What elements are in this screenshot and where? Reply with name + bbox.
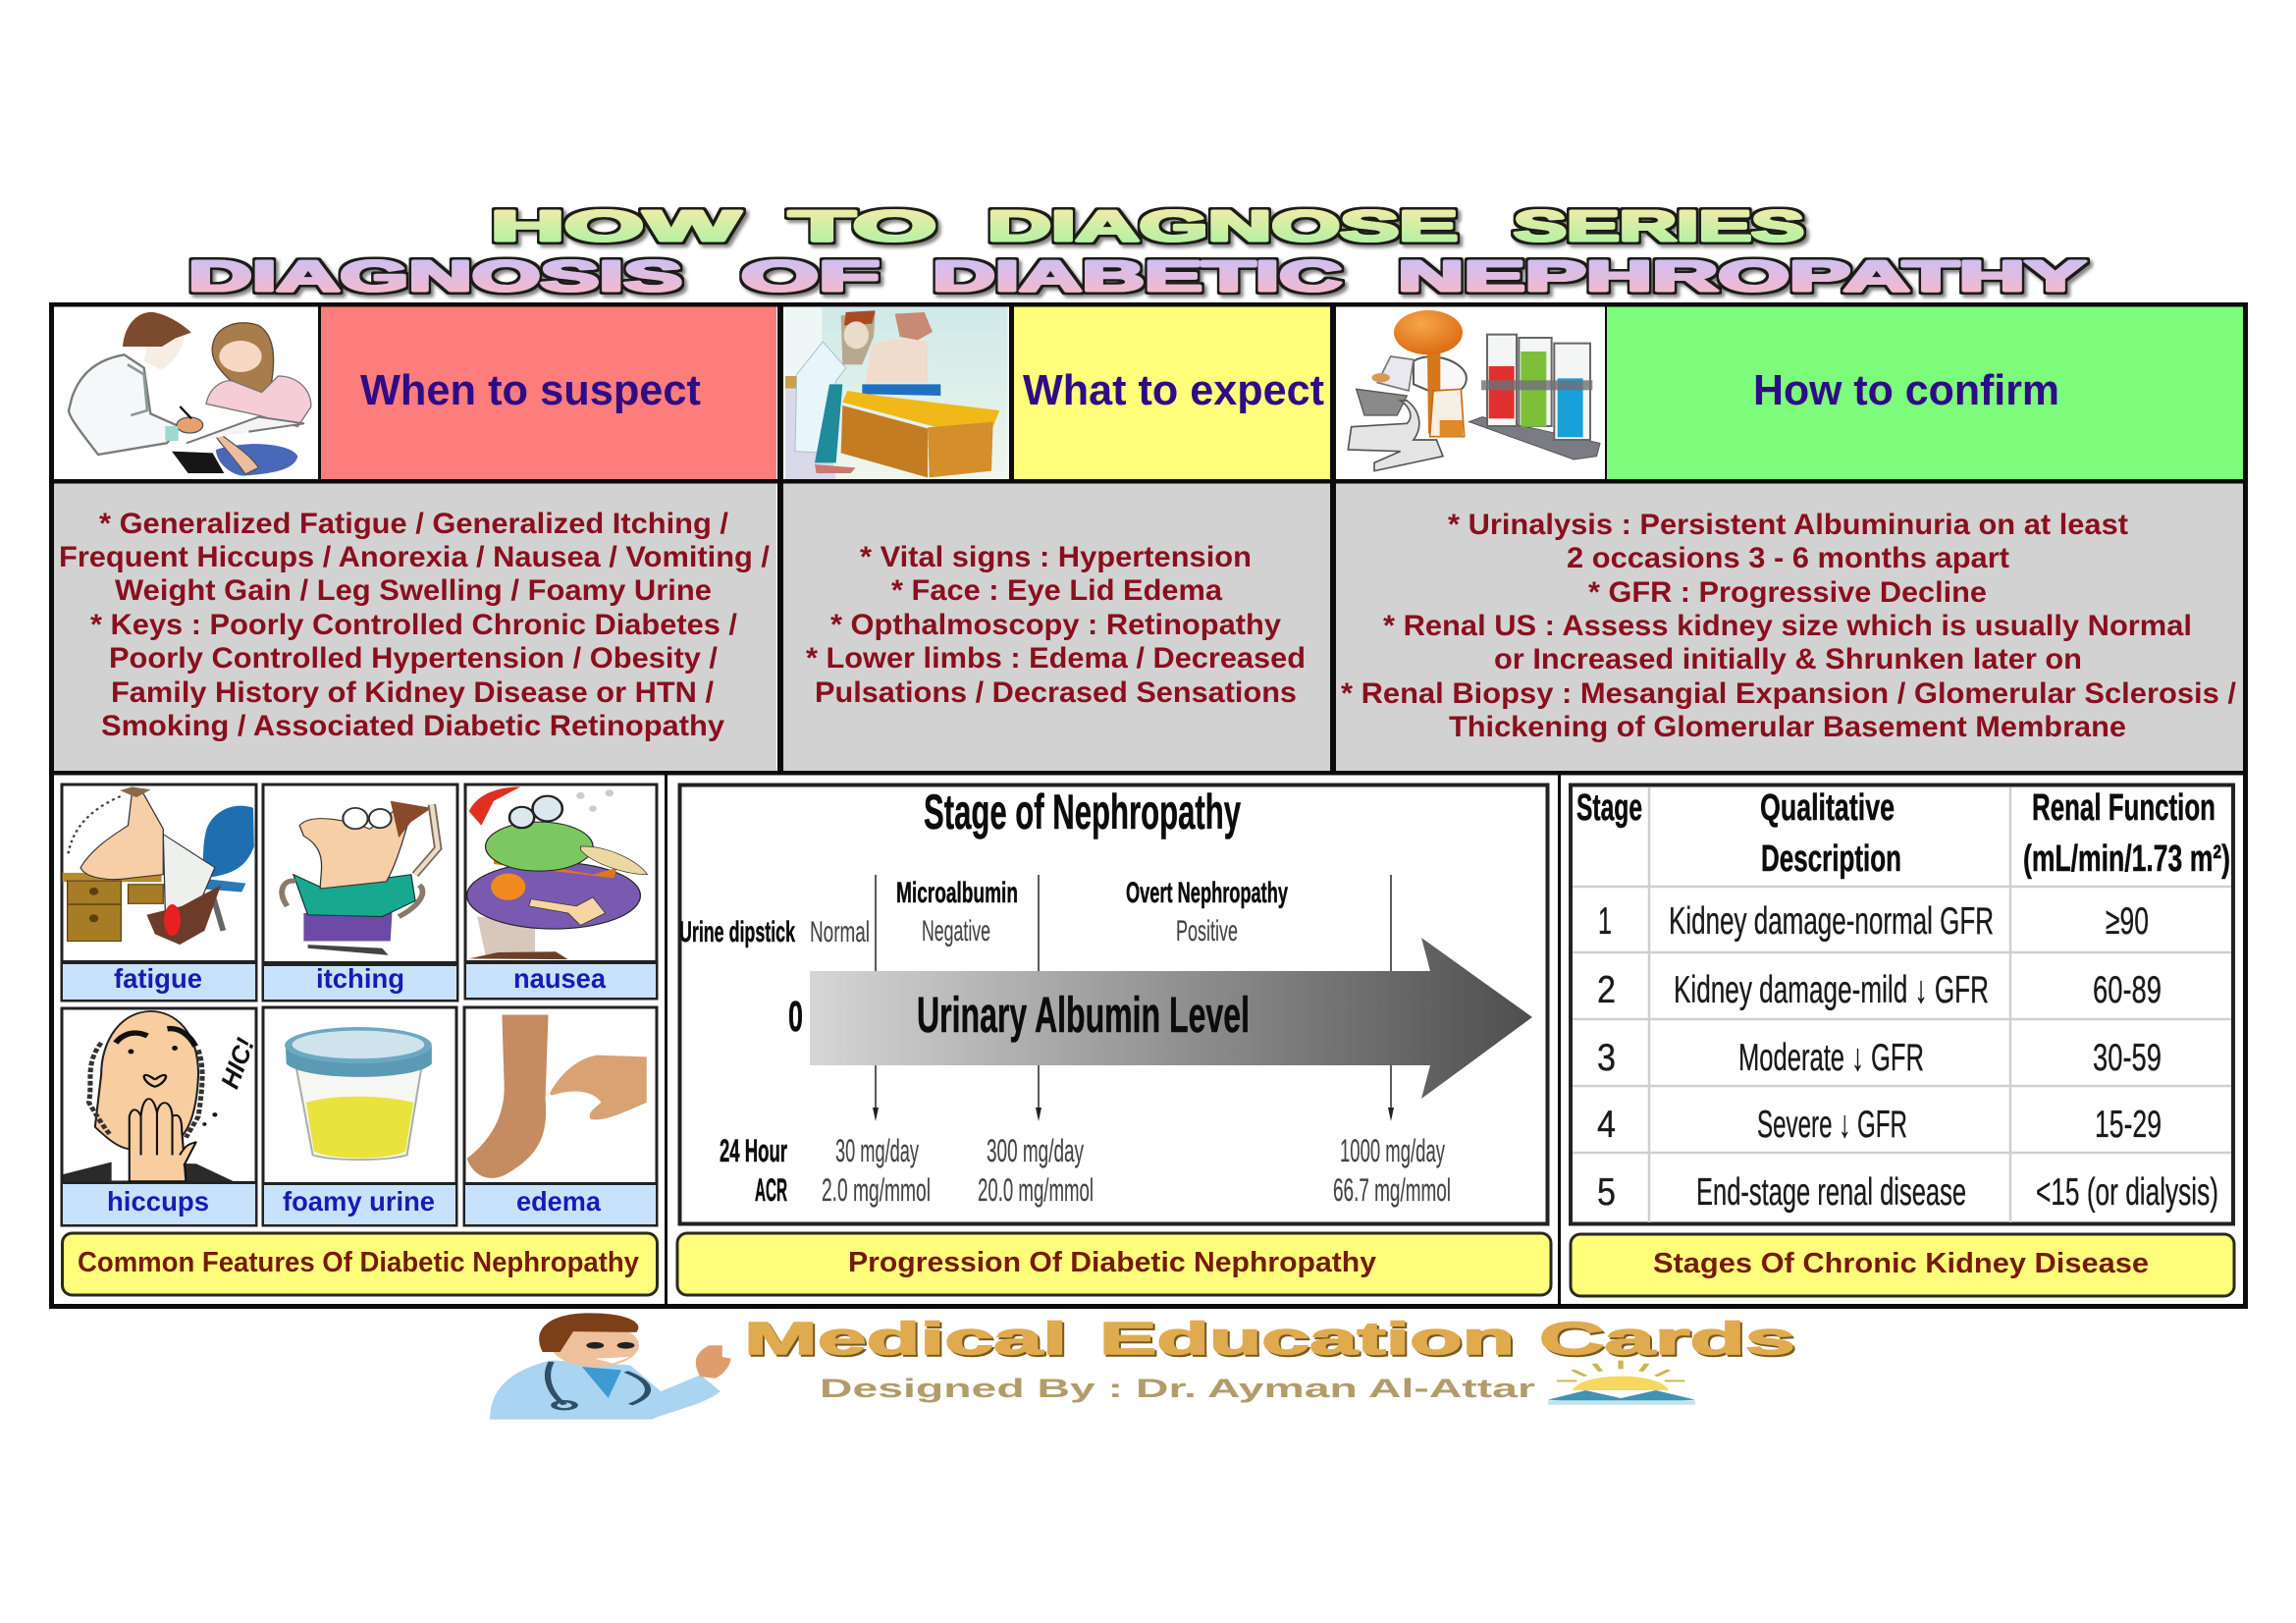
text block: confirm list: * Renal US : Assess kidney size which is usually Normal — [1383, 610, 2192, 642]
text block: suspect list: Family History of Kidney Disease or HTN / — [111, 676, 715, 709]
banner: stages: Stages Of Chronic Kidney Disease — [1653, 1248, 2149, 1279]
measurement labels: 30 mg/day — [835, 1133, 919, 1168]
heading: when to suspect: When to suspect — [360, 366, 701, 414]
text block: confirm list: * Urinalysis : Persistent Albuminuria on at least — [1448, 509, 2128, 541]
measurement labels: 66.7 mg/mmol — [1333, 1172, 1451, 1208]
banner: stages — [1571, 1234, 2234, 1296]
credit: designed by: Designed By : Dr. Ayman Al-Attar — [820, 1374, 1536, 1403]
table rows: End-stage renal disease — [1696, 1171, 1966, 1214]
text block: expect list: Pulsations / Decrased Sensations — [815, 676, 1297, 709]
table rows — [1597, 900, 2218, 1214]
text block: expect list: * Opthalmoscopy : Retinopathy — [830, 609, 1281, 641]
label: edema: edema — [516, 1186, 601, 1217]
panel: stages of chronic kidney disease — [1571, 785, 2234, 1296]
icon: man with hiccups — [63, 1011, 260, 1181]
text block: confirm list: Thickening of Glomerular Basement Membrane — [1449, 711, 2126, 743]
table rows: 4 — [1597, 1104, 1616, 1146]
text block: suspect list: * Generalized Fatigue / Generalized Itching / — [99, 508, 729, 540]
title line 2: NEPHROPATHY — [1398, 252, 2086, 300]
text block: suspect list: Frequent Hiccups / Anorexia / Nausea / Vomiting / — [59, 541, 771, 573]
label: foamy urine: foamy urine — [283, 1186, 435, 1217]
arrow: urinary albumin gradient — [810, 938, 1532, 1099]
table rows: Severe ↓ GFR — [1757, 1104, 1907, 1146]
panel: when to suspect header — [321, 306, 776, 480]
icon: tired man at desk — [63, 786, 254, 945]
measurement labels: ACR — [755, 1172, 787, 1208]
table rows: Moderate ↓ GFR — [1738, 1037, 1924, 1079]
measurement labels: 2.0 mg/mmol — [822, 1172, 931, 1208]
measurement labels: 20.0 mg/mmol — [978, 1172, 1094, 1208]
icon: sunrise over open book — [1548, 1361, 1695, 1405]
table rows: 60-89 — [2093, 969, 2162, 1011]
text block: suspect list — [59, 508, 771, 742]
measurement labels: 1000 mg/day — [1340, 1133, 1445, 1168]
text block: suspect list: * Keys : Poorly Controlled Chronic Diabetes / — [90, 609, 738, 641]
stage labels — [679, 877, 1288, 948]
heading: medical education cards: Cards — [1539, 1313, 1795, 1364]
table header: Qualitative — [1760, 787, 1895, 829]
text block: suspect list: Smoking / Associated Diabetic Retinopathy — [101, 710, 724, 742]
table header — [1576, 787, 2230, 880]
icon: doctor examining patient on bed — [785, 307, 1008, 479]
table header: Renal Function — [2032, 787, 2216, 829]
icon: edema foot and finger — [467, 1015, 647, 1178]
stage labels: Negative — [922, 915, 990, 947]
panel: when to suspect details — [54, 483, 776, 772]
measurement labels: 24 Hour — [720, 1133, 787, 1168]
text block: confirm list: * GFR : Progressive Decline — [1588, 576, 1987, 609]
outer frame and dividers — [49, 302, 2248, 1309]
table header: Description — [1761, 839, 1901, 880]
title line 1: DIAGNOSE — [988, 202, 1458, 250]
title line 1: HOW — [491, 202, 741, 250]
heading: medical education cards — [744, 1313, 1795, 1364]
text block: expect list: * Lower limbs : Edema / Decreased — [806, 642, 1306, 675]
text block: expect list: * Face : Eye Lid Edema — [891, 574, 1222, 607]
title line 2: DIABETIC — [933, 252, 1342, 300]
table rows: 15-29 — [2095, 1104, 2162, 1146]
banner: common features — [63, 1233, 658, 1295]
banner: progression: Progression Of Diabetic Nephropathy — [848, 1247, 1376, 1278]
card: fatigue — [62, 784, 256, 1001]
text block: confirm list: * Renal Biopsy : Mesangial Expansion / Glomerular Sclerosis / — [1341, 677, 2237, 710]
text block: confirm list: 2 occasions 3 - 6 months apart — [1567, 542, 2009, 574]
panel: what to expect header — [1014, 306, 1330, 480]
icon: urine sample cup — [285, 1027, 432, 1160]
heading: what to expect: What to expect — [1023, 366, 1324, 414]
label: HIC exclamation: HIC! — [216, 1034, 260, 1092]
stage labels: Normal — [810, 916, 870, 948]
title line 1 — [491, 202, 1804, 250]
panel: progression of nephropathy — [677, 784, 1551, 1295]
threshold lines — [873, 875, 1394, 1121]
panel: common features — [62, 784, 658, 1295]
stage labels: Overt Nephropathy — [1126, 877, 1288, 909]
title line 1: SERIES — [1514, 202, 1804, 250]
stage labels: Positive — [1176, 915, 1238, 947]
measurement labels — [720, 1133, 1451, 1208]
title line 1: TO — [789, 202, 936, 250]
table rows: 5 — [1597, 1171, 1616, 1214]
icon: cartoon doctor thumbs up — [490, 1313, 731, 1420]
icon: doctor and patient — [54, 307, 317, 477]
table rows: Kidney damage-mild ↓ GFR — [1674, 969, 1989, 1011]
heading: medical education cards: Medical — [744, 1313, 1067, 1364]
label: fatigue: fatigue — [114, 963, 202, 994]
title line 2 — [188, 252, 2086, 300]
label: urinary albumin level: Urinary Albumin Level — [917, 987, 1250, 1043]
title — [188, 202, 2086, 300]
table rows: 30-59 — [2093, 1037, 2162, 1079]
panel: how to confirm header — [1606, 306, 2244, 480]
card: itching — [263, 784, 457, 1001]
text block: confirm list — [1341, 509, 2237, 743]
table rows: ≥90 — [2106, 900, 2149, 943]
card: nausea — [465, 784, 657, 999]
table grid — [1573, 787, 2231, 1222]
chart heading: stage of nephropathy: Stage of Nephropathy — [924, 784, 1241, 839]
title line 2: DIAGNOSIS — [188, 252, 682, 300]
text block: suspect list: Poorly Controlled Hypertension / Obesity / — [109, 642, 719, 675]
panel: what to expect details — [783, 483, 1331, 772]
card: hiccups — [62, 1008, 260, 1225]
table rows: 1 — [1598, 900, 1612, 943]
text block: confirm list: or Increased initially & Shrunken later on — [1494, 643, 2082, 676]
table rows: 3 — [1597, 1037, 1616, 1079]
table rows: Kidney damage-normal GFR — [1669, 900, 1994, 943]
footer logo — [490, 1313, 1795, 1420]
table rows: 2 — [1597, 969, 1616, 1011]
icon: nauseous man — [467, 786, 648, 959]
text block: expect list — [806, 541, 1306, 709]
heading: how to confirm: How to confirm — [1753, 366, 2059, 414]
panel: how to confirm details — [1336, 483, 2244, 772]
stage labels: Microalbumin — [896, 877, 1018, 909]
table header: Stage — [1576, 787, 1642, 829]
card: edema — [464, 1007, 657, 1225]
banner: progression — [677, 1233, 1551, 1295]
label: nausea: nausea — [513, 963, 606, 994]
measurement labels: 300 mg/day — [987, 1133, 1084, 1168]
card: foamy urine — [263, 1007, 456, 1225]
heading: medical education cards: Education — [1099, 1313, 1515, 1364]
text block: suspect list: Weight Gain / Leg Swelling / Foamy Urine — [115, 574, 712, 607]
label: itching: itching — [316, 963, 404, 994]
icon: microscope, scientist and test tubes — [1337, 307, 1603, 479]
banner: common features: Common Features Of Diabetic Nephropathy — [78, 1247, 639, 1278]
icon: man scratching — [282, 801, 438, 955]
title line 2: OF — [741, 252, 880, 300]
stage labels: Urine dipstick — [679, 916, 795, 948]
label: hiccups: hiccups — [107, 1186, 209, 1217]
text block: expect list: * Vital signs : Hypertension — [860, 541, 1252, 573]
label: zero: 0 — [788, 993, 803, 1041]
